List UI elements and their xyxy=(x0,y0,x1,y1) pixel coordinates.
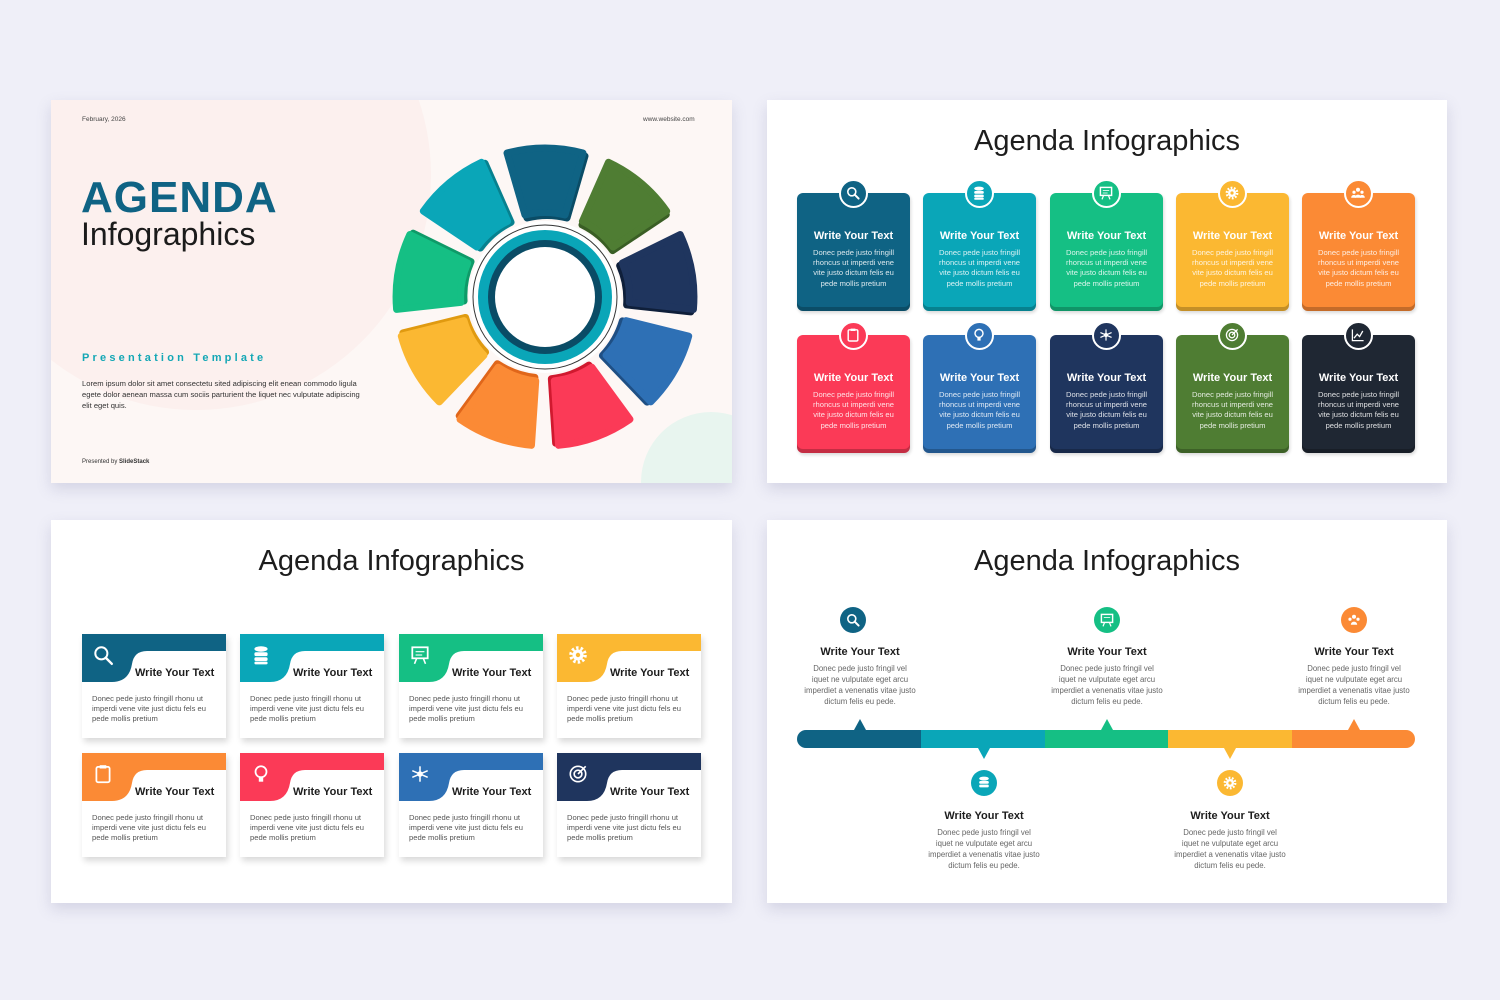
card: red xyxy=(797,335,910,453)
decorative blob xyxy=(0,0,431,410)
card: black xyxy=(1302,335,1415,453)
card: black: Donec pede justo fringill rhoncus ut imperdi vene vite justo dictum felis eu pede mollis pretium xyxy=(1318,390,1399,430)
card: cyan: Write Your Text xyxy=(940,230,1019,242)
card: green: Write Your Text xyxy=(1067,230,1146,242)
title: Agenda Infographics xyxy=(974,125,1240,157)
body text: Lorem ipsum dolor sit amet consectetu sited adipiscing elit enean commodo ligula egete dolor aenean massa cum sociis parturient the liquet nec vulputate adipiscing elit eget quis. xyxy=(82,379,360,410)
card: navy: Donec pede justo fringill rhoncus ut imperdi vene vite justo dictum felis eu pede mollis pretium xyxy=(1066,390,1147,430)
card: cyan: Write Your Text xyxy=(293,667,372,679)
card: cyan xyxy=(240,634,384,738)
card: orange: Donec pede justo fringill rhoncus ut imperdi vene vite justo dictum felis eu pede mollis pretium xyxy=(1318,248,1399,288)
card: orange xyxy=(1302,193,1415,311)
icon: step 1 xyxy=(840,607,866,633)
text: step 3: Write Your Text xyxy=(1067,646,1147,658)
date: February, 2026 xyxy=(82,116,126,123)
card: green xyxy=(1050,193,1163,311)
card: red xyxy=(240,753,384,857)
card: olive xyxy=(1176,335,1289,453)
card: teal: Write Your Text xyxy=(814,230,893,242)
card: teal xyxy=(82,634,226,738)
card: olive: Donec pede justo fringill rhoncus ut imperdi vene vite justo dictum felis eu pede mollis pretium xyxy=(1192,390,1273,430)
card: teal: Donec pede justo fringill rhonu ut imperdi vene vite just dictu fels eu pede mollis pretium xyxy=(92,694,206,723)
card: yellow: Write Your Text xyxy=(610,667,689,679)
timeline bar xyxy=(797,719,1415,759)
panel: tab cards xyxy=(51,520,732,903)
panel: cover slide xyxy=(51,100,732,483)
card: green: Donec pede justo fringill rhonu ut imperdi vene vite just dictu fels eu pede mollis pretium xyxy=(409,694,523,723)
icon: step 5 xyxy=(1341,607,1367,633)
card: yellow xyxy=(1176,193,1289,311)
card: yellow xyxy=(557,634,701,738)
card: blue: Write Your Text xyxy=(452,786,531,798)
card: blue: Donec pede justo fringill rhoncus ut imperdi vene vite justo dictum felis eu pede mollis pretium xyxy=(939,390,1020,430)
text: step 2: Write Your Text xyxy=(944,810,1024,822)
card: blue: Donec pede justo fringill rhonu ut imperdi vene vite just dictu fels eu pede mollis pretium xyxy=(409,813,523,842)
text: step 1: Write Your Text xyxy=(820,646,900,658)
card: red: Donec pede justo fringill rhoncus ut imperdi vene vite justo dictum felis eu pede mollis pretium xyxy=(813,390,894,430)
card: navy: Write Your Text xyxy=(1067,372,1146,384)
card: yellow: Write Your Text xyxy=(1193,230,1272,242)
text: step 1: Donec pede justo fringil vel iquet ne vulputate eget arcu imperdiet a venenatis vitae justo dictum felis eu pede. xyxy=(804,664,916,706)
card: blue: Write Your Text xyxy=(940,372,1019,384)
card: teal: Donec pede justo fringill rhoncus ut imperdi vene vite justo dictum felis eu pede mollis pretium xyxy=(813,248,894,288)
text: step 4: Write Your Text xyxy=(1190,810,1270,822)
card: navy xyxy=(557,753,701,857)
title: Agenda Infographics xyxy=(258,545,525,577)
text: step 4: Donec pede justo fringil vel iquet ne vulputate eget arcu imperdiet a venenatis vitae justo dictum felis eu pede. xyxy=(1174,828,1286,870)
icon: step 3 xyxy=(1094,607,1120,633)
card: navy: Donec pede justo fringill rhonu ut imperdi vene vite just dictu fels eu pede mollis pretium xyxy=(567,813,681,842)
card: orange: Write Your Text xyxy=(135,786,214,798)
subtitle: Presentation Template xyxy=(82,352,266,364)
card: black: Write Your Text xyxy=(1319,372,1398,384)
icon: step 4 xyxy=(1217,770,1243,796)
chart: flower xyxy=(392,144,698,449)
text: step 3: Donec pede justo fringil vel iquet ne vulputate eget arcu imperdiet a venenatis vitae justo dictum felis eu pede. xyxy=(1051,664,1163,706)
card: teal: Write Your Text xyxy=(135,667,214,679)
title: Agenda Infographics xyxy=(974,545,1240,577)
card: orange: Donec pede justo fringill rhonu ut imperdi vene vite just dictu fels eu pede mollis pretium xyxy=(92,813,206,842)
card: navy: Write Your Text xyxy=(610,786,689,798)
heading: Infographics: Infographics xyxy=(81,216,255,252)
panel: timeline xyxy=(767,520,1447,903)
card: navy xyxy=(1050,335,1163,453)
card: cyan: Donec pede justo fringill rhoncus ut imperdi vene vite justo dictum felis eu pede mollis pretium xyxy=(939,248,1020,288)
card: red: Write Your Text xyxy=(814,372,893,384)
card: cyan: Donec pede justo fringill rhonu ut imperdi vene vite just dictu fels eu pede mollis pretium xyxy=(250,694,364,723)
card: blue xyxy=(923,335,1036,453)
text: step 5: Donec pede justo fringil vel iquet ne vulputate eget arcu imperdiet a venenatis vitae justo dictum felis eu pede. xyxy=(1298,664,1410,706)
card: orange xyxy=(82,753,226,857)
card: green: Donec pede justo fringill rhoncus ut imperdi vene vite justo dictum felis eu pede mollis pretium xyxy=(1066,248,1147,288)
card: red: Donec pede justo fringill rhonu ut imperdi vene vite just dictu fels eu pede mollis pretium xyxy=(250,813,364,842)
presented by: Presented by SlideStack xyxy=(82,459,149,465)
card: blue xyxy=(399,753,543,857)
card: red: Write Your Text xyxy=(293,786,372,798)
icon: step 2 xyxy=(971,770,997,796)
card: yellow: Donec pede justo fringill rhoncus ut imperdi vene vite justo dictum felis eu pede mollis pretium xyxy=(1192,248,1273,288)
card: green xyxy=(399,634,543,738)
card: teal xyxy=(797,193,910,311)
text: step 5: Write Your Text xyxy=(1314,646,1394,658)
card: orange: Write Your Text xyxy=(1319,230,1398,242)
card: green: Write Your Text xyxy=(452,667,531,679)
card: cyan xyxy=(923,193,1036,311)
card: olive: Write Your Text xyxy=(1193,372,1272,384)
panel: card grid xyxy=(767,100,1447,483)
text: step 2: Donec pede justo fringil vel iquet ne vulputate eget arcu imperdiet a venenatis vitae justo dictum felis eu pede. xyxy=(928,828,1040,870)
heading: AGENDA: AGENDA xyxy=(81,173,278,222)
card: yellow: Donec pede justo fringill rhonu ut imperdi vene vite just dictu fels eu pede mollis pretium xyxy=(567,694,681,723)
website: www.website.com xyxy=(643,116,695,123)
